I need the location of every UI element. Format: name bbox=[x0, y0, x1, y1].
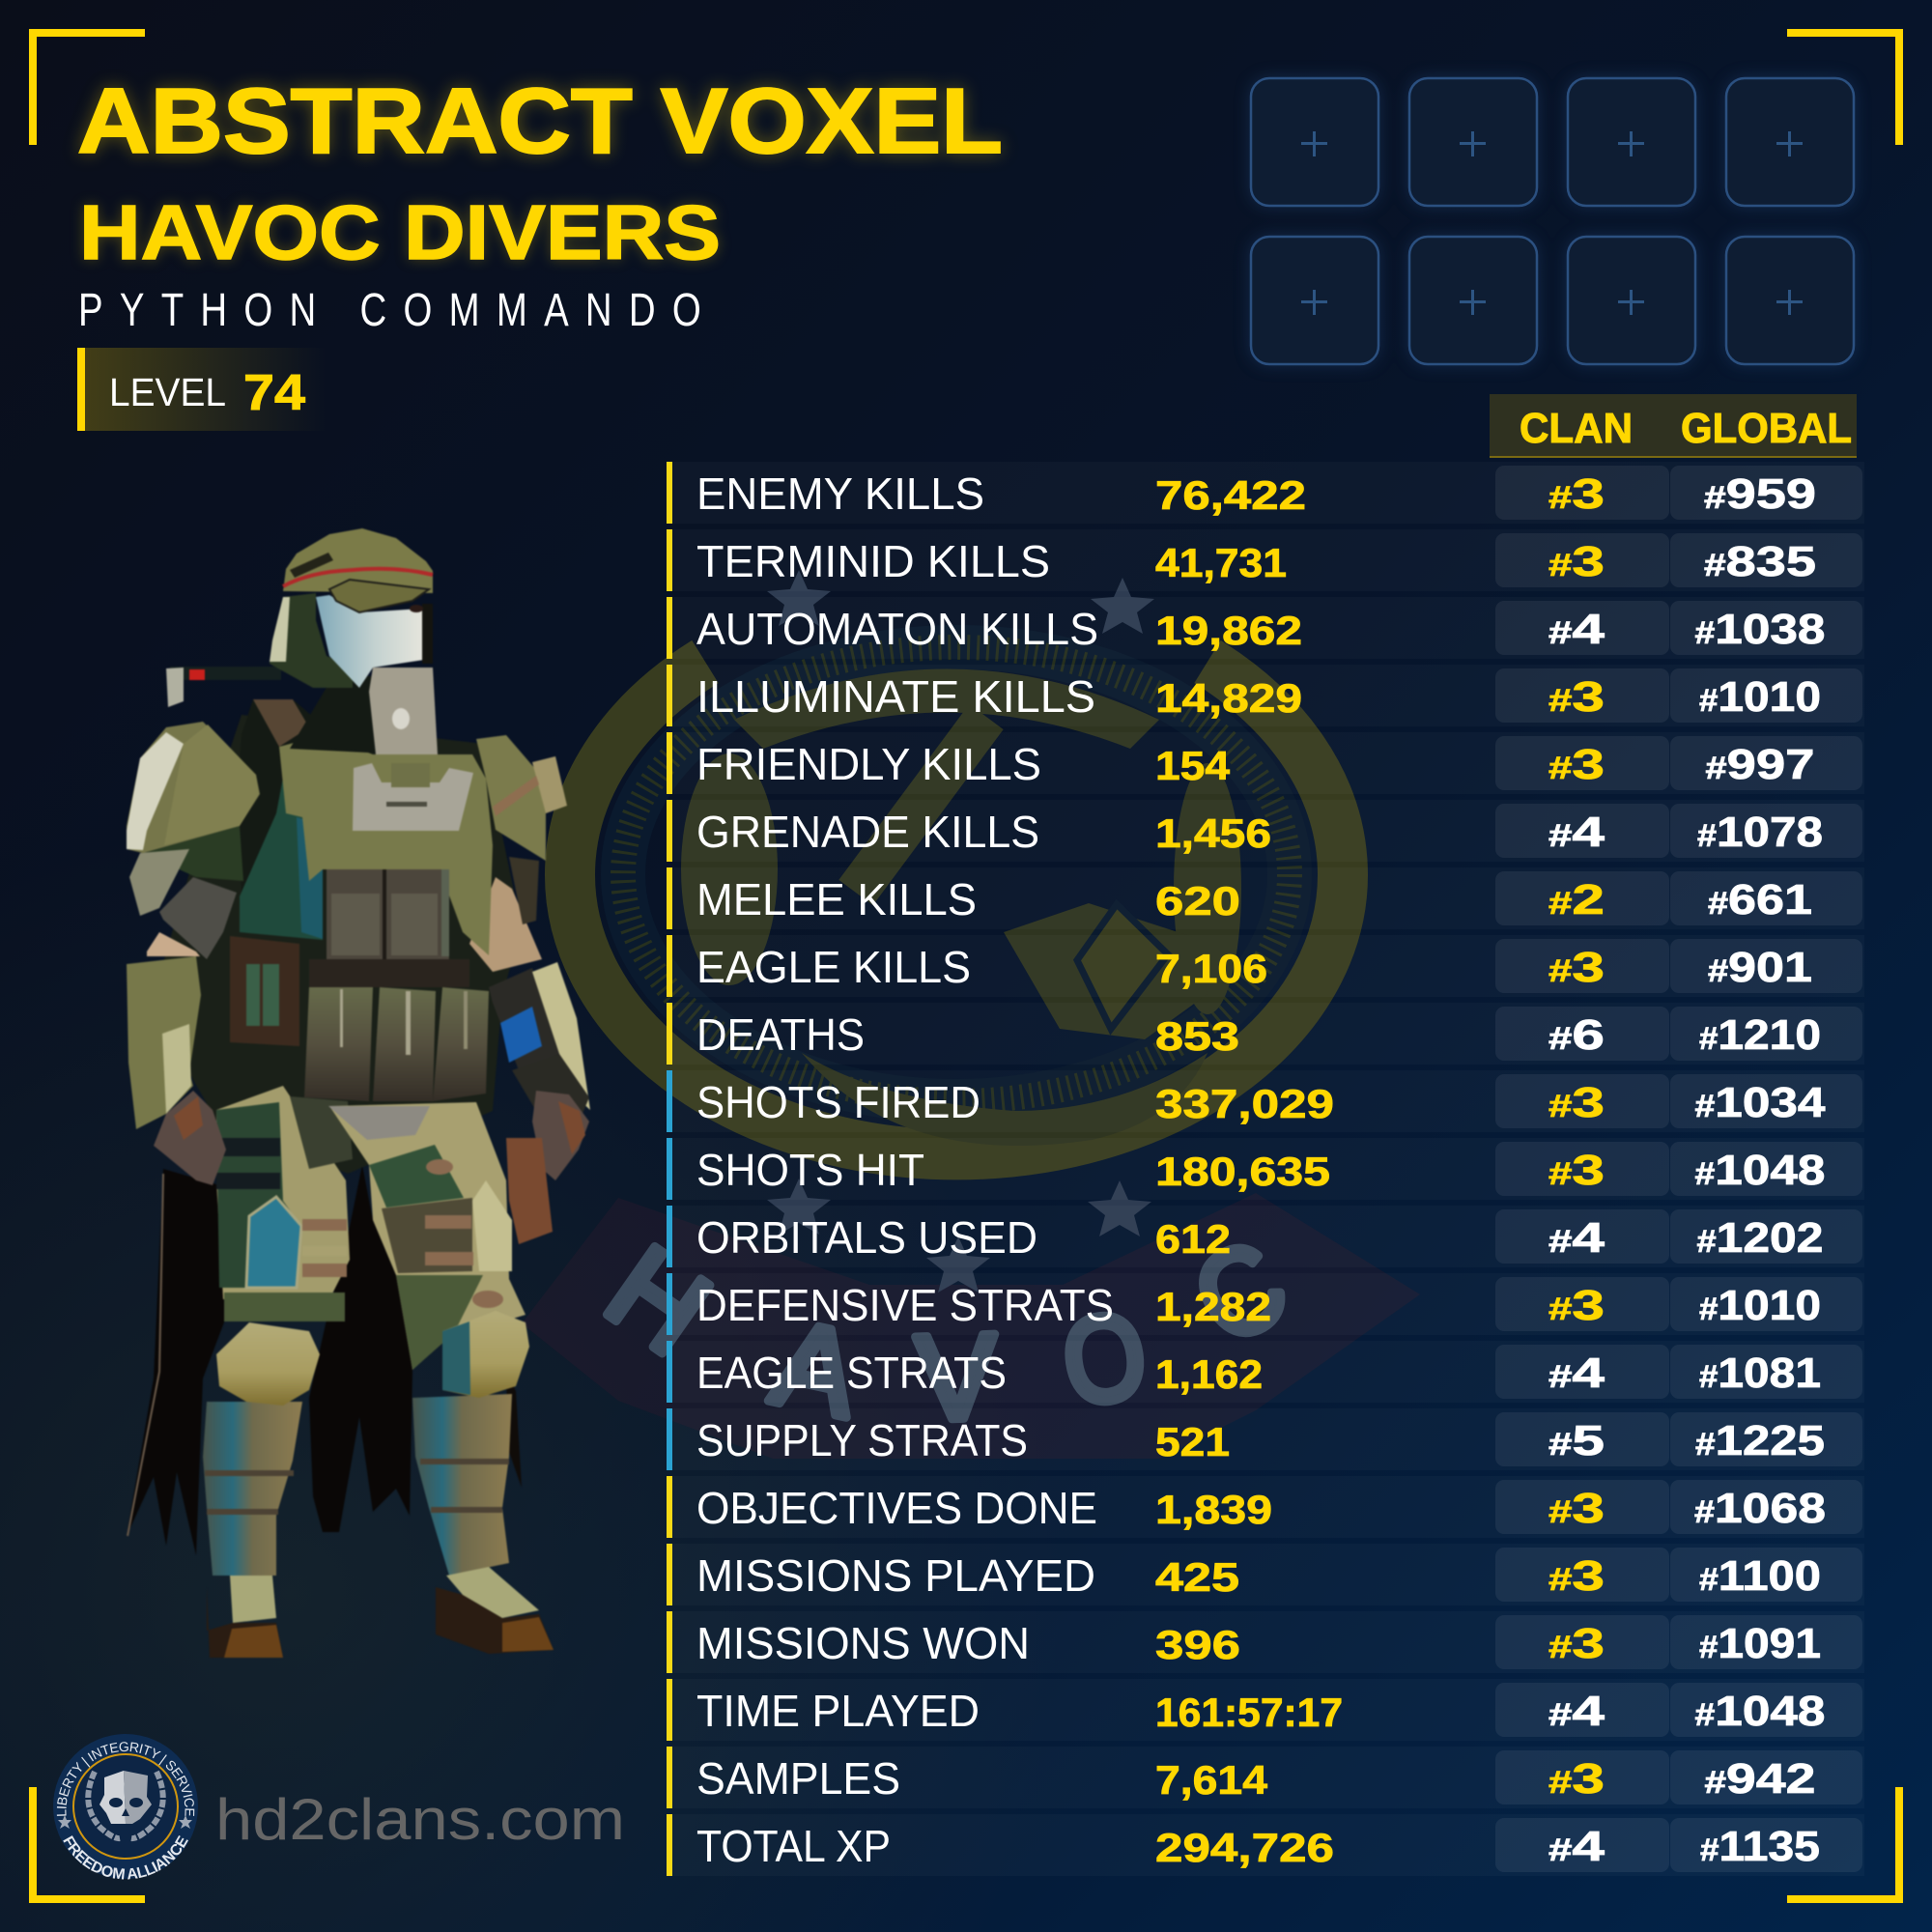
left thigh bbox=[216, 1086, 353, 1321]
row: shots hit: #3 bbox=[1548, 1147, 1605, 1194]
row: eagle kills: 7,106 bbox=[1155, 946, 1267, 991]
red banner behind emblem bbox=[522, 1193, 1420, 1459]
row: missions played: #1100 bbox=[1699, 1552, 1821, 1600]
row: shots hit: SHOTS HIT bbox=[696, 1145, 924, 1195]
chest pouches bbox=[309, 869, 469, 987]
row: terminid kills: 41,731 bbox=[1155, 540, 1287, 585]
HAVOC lettering: C bbox=[1173, 1214, 1308, 1371]
row: missions won: #1091 bbox=[1699, 1620, 1821, 1667]
row: supply strats: 521 bbox=[1155, 1419, 1230, 1464]
slot row 2 bbox=[1251, 237, 1854, 364]
row: missions played: MISSIONS PLAYED bbox=[696, 1550, 1095, 1601]
row: total xp: TOTAL XP bbox=[696, 1821, 891, 1871]
central diamond bbox=[1077, 904, 1168, 1029]
row: shots hit: #1048 bbox=[1694, 1147, 1826, 1194]
row: melee kills: MELEE KILLS bbox=[696, 874, 977, 924]
olive inner shapes bbox=[681, 668, 1241, 1146]
row: illuminate kills bbox=[667, 665, 1864, 726]
stratagem / equipment slots bbox=[1251, 78, 1854, 364]
row: melee kills: #661 bbox=[1708, 876, 1812, 923]
armor name: PYTHON COMMANDO bbox=[78, 285, 701, 336]
row: terminid kills: TERMINID KILLS bbox=[696, 536, 1050, 586]
row: supply strats: #1225 bbox=[1695, 1417, 1825, 1464]
row: supply strats: #5 bbox=[1548, 1417, 1605, 1464]
row: enemy kills: #959 bbox=[1704, 470, 1816, 518]
right shin and boot bbox=[412, 1311, 554, 1654]
back straps bbox=[237, 699, 333, 896]
row: automaton kills: #1038 bbox=[1694, 606, 1826, 653]
badge ring text: LIBERTY | INTEGRITY | SERVICE bbox=[56, 1742, 195, 1816]
row: illuminate kills: #1010 bbox=[1699, 673, 1821, 721]
skull bbox=[99, 1771, 152, 1824]
row: automaton kills bbox=[667, 597, 1864, 659]
row: grenade kills: 1,456 bbox=[1155, 810, 1271, 856]
row: shots fired bbox=[667, 1070, 1864, 1132]
left shoulder pad bbox=[127, 722, 260, 916]
row: time played: #4 bbox=[1548, 1688, 1605, 1735]
row: grenade kills: GRENADE KILLS bbox=[696, 807, 1039, 857]
row: terminid kills: #3 bbox=[1548, 538, 1605, 585]
row: friendly kills bbox=[667, 732, 1864, 794]
neck plate bbox=[290, 668, 438, 754]
logo: freedom alliance badge bbox=[53, 1734, 198, 1880]
row: friendly kills: FRIENDLY KILLS bbox=[696, 739, 1041, 789]
row: eagle kills: EAGLE KILLS bbox=[696, 942, 971, 992]
watermark emblem bbox=[522, 570, 1420, 1459]
left shin and boot bbox=[203, 1322, 320, 1658]
row: orbitals used bbox=[667, 1206, 1864, 1267]
website url: hd2clans.com bbox=[215, 1787, 625, 1852]
row: objectives done bbox=[667, 1476, 1864, 1538]
row: automaton kills: AUTOMATON KILLS bbox=[696, 604, 1098, 654]
belt pouches bbox=[304, 987, 489, 1101]
row: enemy kills: ENEMY KILLS bbox=[696, 469, 984, 519]
row: orbitals used: #1202 bbox=[1696, 1214, 1824, 1262]
row: deaths: DEATHS bbox=[696, 1009, 865, 1060]
row: missions played: #3 bbox=[1548, 1552, 1605, 1600]
character: armored diver bbox=[127, 528, 590, 1658]
outer olive ring bbox=[570, 662, 1343, 1154]
row: shots fired: 337,029 bbox=[1155, 1081, 1334, 1126]
row: defensive strats: #1010 bbox=[1699, 1282, 1821, 1329]
row: illuminate kills: ILLUMINATE KILLS bbox=[696, 671, 1095, 722]
rifle on back bbox=[166, 667, 281, 707]
column headers: GLOBAL bbox=[1681, 405, 1852, 452]
row: orbitals used: ORBITALS USED bbox=[696, 1212, 1037, 1263]
helmet bbox=[270, 528, 433, 688]
row: eagle strats: #1081 bbox=[1699, 1350, 1821, 1397]
column headers bbox=[1490, 394, 1857, 458]
row: samples: #942 bbox=[1704, 1755, 1816, 1803]
row: friendly kills: #997 bbox=[1706, 741, 1814, 788]
right shoulder and arm bbox=[469, 735, 590, 1180]
row: samples: SAMPLES bbox=[696, 1753, 900, 1804]
row: illuminate kills: #3 bbox=[1548, 673, 1605, 721]
stars bbox=[767, 570, 1154, 1293]
row: samples: #3 bbox=[1548, 1755, 1605, 1803]
row: melee kills: #2 bbox=[1548, 876, 1605, 923]
torso bbox=[230, 735, 493, 1046]
level badge bbox=[77, 348, 327, 431]
row: deaths: 853 bbox=[1155, 1013, 1239, 1059]
HAVOC lettering bbox=[584, 1214, 1308, 1446]
cape bbox=[127, 1165, 522, 1555]
row: melee kills bbox=[667, 867, 1864, 929]
subtitle: clan name: HAVOC DIVERS bbox=[79, 189, 721, 275]
row: orbitals used: 612 bbox=[1155, 1216, 1231, 1262]
inner dark band bbox=[623, 647, 1290, 1101]
row: terminid kills: #835 bbox=[1704, 538, 1816, 585]
row: missions won bbox=[667, 1611, 1864, 1673]
row: enemy kills: 76,422 bbox=[1155, 472, 1306, 518]
row: total xp: 294,726 bbox=[1155, 1825, 1334, 1870]
row: total xp: #4 bbox=[1548, 1823, 1605, 1870]
row: grenade kills bbox=[667, 800, 1864, 862]
row: terminid kills bbox=[667, 529, 1864, 591]
row: time played: #1048 bbox=[1694, 1688, 1826, 1735]
row: defensive strats: 1,282 bbox=[1155, 1284, 1271, 1329]
HAVOC lettering: V bbox=[914, 1309, 999, 1446]
left arm bbox=[127, 826, 243, 1185]
row: orbitals used: #4 bbox=[1548, 1214, 1605, 1262]
badge ring text: FREEDOM ALLIANCE bbox=[63, 1835, 188, 1880]
column headers: CLAN bbox=[1520, 405, 1633, 452]
row: melee kills: 620 bbox=[1155, 878, 1240, 923]
row: missions played: 425 bbox=[1155, 1554, 1239, 1600]
row: eagle kills: #3 bbox=[1548, 944, 1605, 991]
row: time played: 161:57:17 bbox=[1155, 1690, 1343, 1735]
row: missions won: MISSIONS WON bbox=[696, 1618, 1030, 1668]
level badge: 74 bbox=[243, 365, 305, 421]
row: total xp bbox=[667, 1814, 1864, 1876]
HAVOC lettering: A bbox=[762, 1294, 869, 1443]
row: eagle strats bbox=[667, 1341, 1864, 1403]
row: grenade kills: #1078 bbox=[1697, 809, 1823, 856]
row: enemy kills bbox=[667, 462, 1864, 524]
row: deaths: #6 bbox=[1548, 1011, 1605, 1059]
row: defensive strats bbox=[667, 1273, 1864, 1335]
row: eagle kills bbox=[667, 935, 1864, 997]
badge ring text bbox=[56, 1742, 195, 1880]
row: shots fired: #3 bbox=[1548, 1079, 1605, 1126]
row: enemy kills: #3 bbox=[1548, 470, 1605, 518]
HAVOC lettering: O bbox=[1055, 1286, 1154, 1432]
row: deaths: #1210 bbox=[1699, 1011, 1821, 1059]
row: samples: 7,614 bbox=[1155, 1757, 1268, 1803]
row: shots hit bbox=[667, 1138, 1864, 1200]
row: eagle kills: #901 bbox=[1708, 944, 1812, 991]
row: friendly kills: #3 bbox=[1548, 741, 1605, 788]
row: shots fired: #1034 bbox=[1694, 1079, 1826, 1126]
row: friendly kills: 154 bbox=[1155, 743, 1231, 788]
row: automaton kills: #4 bbox=[1548, 606, 1605, 653]
stats table bbox=[667, 462, 1864, 1876]
row: eagle strats: EAGLE STRATS bbox=[696, 1348, 1007, 1398]
row: deaths bbox=[667, 1003, 1864, 1065]
row: total xp: #1135 bbox=[1700, 1823, 1820, 1870]
badge stars bbox=[58, 1815, 192, 1829]
row: supply strats: SUPPLY STRATS bbox=[696, 1415, 1028, 1465]
row: objectives done: OBJECTIVES DONE bbox=[696, 1483, 1097, 1533]
row: objectives done: #3 bbox=[1548, 1485, 1605, 1532]
row: shots hit: 180,635 bbox=[1155, 1149, 1330, 1194]
row: missions won: 396 bbox=[1155, 1622, 1240, 1667]
row: objectives done: 1,839 bbox=[1155, 1487, 1272, 1532]
row: supply strats bbox=[667, 1408, 1864, 1470]
row: missions played bbox=[667, 1544, 1864, 1605]
row: eagle strats: 1,162 bbox=[1155, 1351, 1263, 1397]
row: defensive strats: #3 bbox=[1548, 1282, 1605, 1329]
row: grenade kills: #4 bbox=[1548, 809, 1605, 856]
slot row 1 bbox=[1251, 78, 1854, 206]
HAVOC lettering: H bbox=[584, 1220, 732, 1380]
row: time played bbox=[667, 1679, 1864, 1741]
wreath bbox=[88, 1772, 163, 1838]
row: missions won: #3 bbox=[1548, 1620, 1605, 1667]
row: time played: TIME PLAYED bbox=[696, 1686, 980, 1736]
row: shots fired: SHOTS FIRED bbox=[696, 1077, 980, 1127]
right thigh and pelvis bbox=[328, 1102, 553, 1370]
row: samples bbox=[667, 1747, 1864, 1808]
row: eagle strats: #4 bbox=[1548, 1350, 1605, 1397]
row: automaton kills: 19,862 bbox=[1155, 608, 1302, 653]
title: player name: ABSTRACT VOXEL bbox=[77, 70, 1003, 173]
row: illuminate kills: 14,829 bbox=[1155, 675, 1302, 721]
row: defensive strats: DEFENSIVE STRATS bbox=[696, 1280, 1114, 1330]
level badge: LEVEL bbox=[109, 370, 226, 414]
body underlay bbox=[162, 715, 522, 1174]
row: objectives done: #1068 bbox=[1694, 1485, 1826, 1532]
